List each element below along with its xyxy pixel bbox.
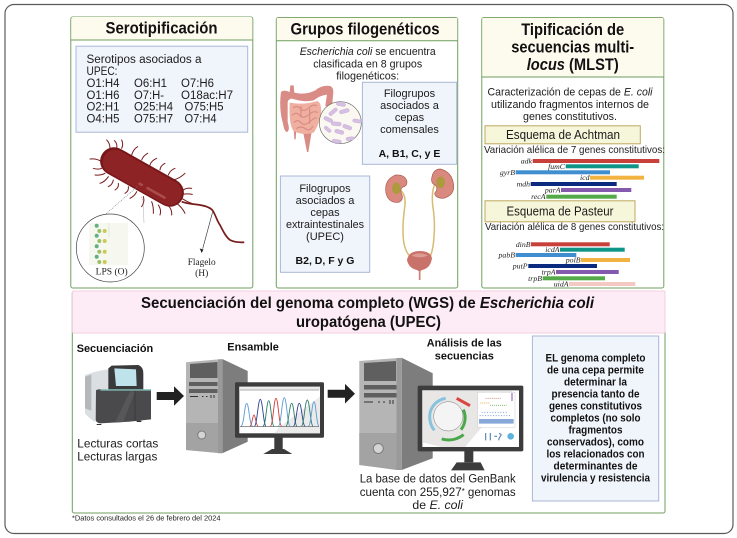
text block: filogrupos comensales: cepas [395, 112, 425, 124]
text block: caracterización [488, 86, 653, 123]
callout: genoma completo: genes constitutivos [549, 400, 642, 412]
panel: MLST [482, 18, 665, 288]
text block: filogrupos comensales: A, B1, C, y E [379, 148, 440, 160]
label: secuenciación: Secuenciación [77, 343, 153, 355]
text block: GenBank: * [462, 487, 465, 496]
chart: genes Achtman: adk [521, 156, 533, 166]
text block: filogrupos extraintestinales: extraintestinales [286, 219, 364, 231]
icon: computer tower 1 [186, 359, 248, 453]
text block: caracterización: genes constitutivos. [523, 111, 617, 123]
text block: serotipos asociados: UPEC: [86, 66, 118, 78]
arrow: secuenciación a ensamble [157, 386, 184, 406]
callout: genoma completo: completos (no solo [550, 412, 641, 424]
callout: genoma completo: virulencia y resistencia [541, 472, 651, 484]
icon: monitor genome analysis [418, 386, 523, 470]
icon: bacteria E. coli [90, 140, 244, 242]
text block: lecturas [77, 436, 158, 464]
text block: clasificación: Escherichia coli se encuentra [300, 46, 436, 58]
text block: caracterización: Caracterización de cepas de E. coli [488, 86, 653, 98]
text block: filogrupos extraintestinales: B2, D, F y G [296, 255, 354, 267]
callout: genoma completo: presencia tanto de [552, 388, 640, 400]
chart: genes Pasteur: trpB [528, 274, 542, 283]
icon: monitor chromatogram [235, 382, 324, 454]
panel: secuenciación del genoma completo [72, 291, 665, 513]
text block: filogrupos extraintestinales: Filogrupos [299, 183, 351, 195]
label: esquema de Pasteur [485, 201, 635, 222]
text block: serotipos asociados: O75:H5 [184, 102, 224, 114]
icon: urinary tract [386, 169, 454, 280]
text: variación alélica 8 genes: Variación alélica de 8 genes constitutivos: [485, 222, 664, 233]
callout: flagelo (H): (H) [195, 268, 208, 279]
text block: filogrupos comensales: Filogrupos [384, 88, 436, 100]
callout: genoma completo: determinar la [564, 376, 628, 388]
text block: clasificación: clasificada en 8 grupos [313, 58, 423, 70]
chart: genes Achtman: gyrB [500, 168, 515, 177]
text block: filogrupos comensales: comensales [380, 124, 439, 136]
chart: genes Pasteur: trpA [542, 268, 556, 276]
callout: genoma completo: conservados), como [547, 436, 644, 448]
text block: GenBank: cuenta con 255,927 [360, 485, 468, 499]
chart: genes Pasteur: uidA [554, 280, 569, 288]
text block: filogrupos comensales [362, 82, 457, 164]
panel: grupos filogenéticos [276, 18, 458, 288]
chart: genes Pasteur: icdA [545, 245, 560, 254]
panel: serotipificación [71, 17, 253, 288]
text block: serotipos asociados: O7:H6 [181, 78, 214, 90]
text block: GenBank: de E. coli [412, 498, 464, 512]
text block: serotipos asociados: Serotipos asociados a [86, 54, 202, 66]
heading: tipificación MLST: Tipificación de [521, 21, 624, 39]
chart: genes Pasteur [498, 240, 635, 288]
text block: serotipos asociados: O2:H1 [86, 102, 120, 114]
text block: serotipos asociados: O25:H4 [134, 102, 174, 114]
heading: serotipificación: Serotipificación [106, 20, 218, 38]
text block: caracterización: utilizando fragmentos internos de [491, 99, 649, 111]
text block: filogrupos extraintestinales: (UPEC) [306, 231, 344, 243]
arrow: ensamble a análisis [328, 384, 355, 404]
icon: intestine with bacteria [280, 85, 362, 152]
label: esquema de Achtman: Esquema de Achtman [506, 128, 620, 142]
callout: genoma completo: de una cepa permite [547, 364, 644, 376]
text block: clasificación [300, 46, 436, 82]
chart: genes Pasteur: pabB [498, 250, 515, 260]
heading: tipificación MLST: locus (MLST) [527, 56, 619, 74]
icon: computer tower 2 [359, 358, 433, 470]
text block: serotipos asociados: O6:H1 [134, 78, 167, 90]
text block: filogrupos comensales: asociados a [380, 100, 440, 112]
text: variación alélica 7 genes: Variación alélica de 7 genes constitutivos: [484, 145, 665, 156]
chart: genes Achtman [500, 156, 659, 201]
chart: genes Pasteur: polB [565, 256, 581, 264]
text block: GenBank: La base de datos del GenBank [360, 472, 516, 486]
chart: genes Pasteur: putP [512, 262, 528, 270]
text block: serotipos asociados: O4:H5 [86, 114, 120, 126]
text block: serotipos asociados: O1:H4 [86, 78, 120, 90]
text block: serotipos asociados [76, 46, 248, 132]
chart: genes Pasteur: dinB [516, 240, 531, 249]
text block: lecturas: Lecturas cortas [77, 436, 158, 450]
label: esquema de Achtman [485, 126, 640, 144]
callout: genoma completo [532, 336, 659, 501]
icon: LPS (O) magnifier: LPS (O) [96, 266, 128, 278]
chart: genes Achtman: icd [580, 173, 590, 182]
icon: sequencer [85, 365, 151, 425]
callout: genoma completo: los relacionados con [546, 448, 644, 460]
label: esquema de Pasteur: Esquema de Pasteur [506, 204, 614, 218]
label: ensamble: Ensamble [227, 342, 279, 354]
chart: genes Achtman: fumC [548, 162, 566, 171]
heading: grupos filogenéticos: Grupos filogenéticos [290, 20, 440, 38]
callout: flagelo (H): Flagelo [188, 258, 216, 268]
label: análisis de las secuencias: Análisis de las [427, 338, 502, 350]
text block: serotipos asociados: O7:H4 [184, 114, 217, 126]
footnote: *Datos consultados el 26 de febrero del 2024 [72, 516, 221, 522]
callout: genoma completo: fragmentos [568, 424, 622, 436]
label: análisis de las secuencias: secuencias [435, 350, 494, 362]
text block: filogrupos extraintestinales: cepas [310, 207, 340, 219]
text block: lecturas: Lecturas largas [77, 450, 157, 464]
text block: GenBank [360, 472, 516, 512]
text block: GenBank: genomas [465, 485, 516, 499]
text block: serotipos asociados: O1:H6 [86, 90, 120, 102]
heading: WGS: uropatógena (UPEC) [296, 314, 441, 331]
callout: genoma completo: determinantes de [554, 460, 638, 472]
text block: filogrupos extraintestinales: asociados a [296, 195, 355, 207]
text block: clasificación: filogenéticos: [336, 70, 399, 82]
text block: serotipos asociados: O75:H7 [134, 114, 173, 126]
heading: tipificación MLST [482, 18, 664, 77]
label: análisis de las secuencias [427, 338, 502, 362]
chart: genes Achtman: parA [544, 186, 561, 194]
heading: tipificación MLST: secuencias multi- [511, 39, 634, 57]
text block: filogrupos extraintestinales [280, 176, 370, 272]
heading: serotipificación [71, 17, 252, 40]
text block: serotipos asociados: O18ac:H7 [181, 90, 233, 102]
callout: flagelo (H) [188, 212, 216, 279]
icon: LPS (O) magnifier [76, 186, 144, 282]
heading: WGS: Secuenciación del genoma completo (WGS) de Escherichia coli [141, 295, 595, 312]
chart: genes Achtman: recA [531, 192, 546, 201]
chart: genes Achtman: mdh [517, 180, 530, 188]
heading: WGS [72, 291, 665, 333]
callout: genoma completo: EL genoma completo [546, 352, 646, 364]
text block: serotipos asociados: O7:H- [134, 90, 164, 102]
